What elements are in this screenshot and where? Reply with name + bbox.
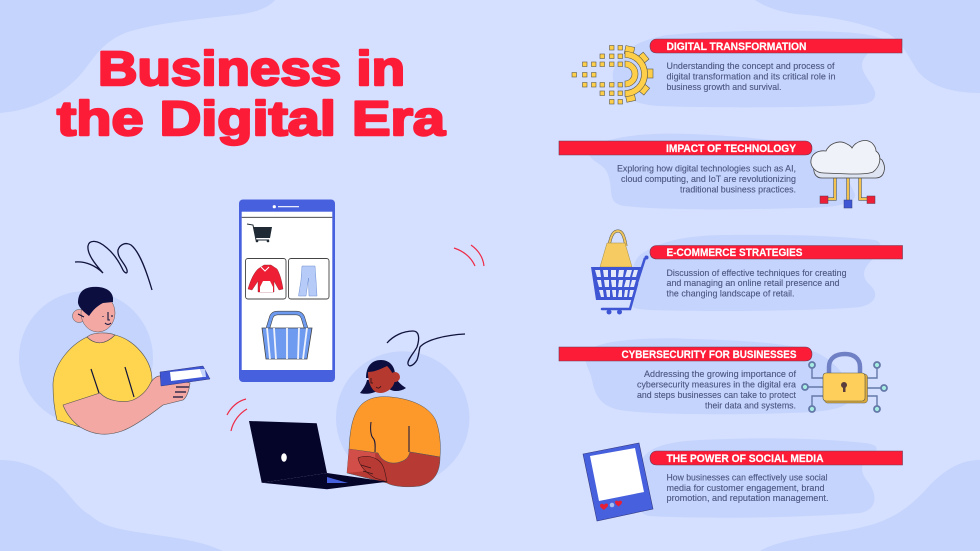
product: jeans [288, 258, 329, 299]
panel: impact of technology [559, 134, 884, 209]
icon: digital gear [572, 46, 653, 104]
title: Business in [98, 43, 405, 96]
icon: shopping cart [247, 224, 272, 242]
icon: social media post [583, 443, 653, 521]
illustration: man holding phone [19, 241, 210, 434]
description: the changing landscape of retail. [666, 288, 794, 298]
description [666, 472, 828, 503]
heading bar: IMPACT OF TECHNOLOGY [666, 143, 797, 155]
description: Understanding the concept and process of [666, 61, 835, 71]
description: Discussion of effective techniques for creating [666, 268, 847, 278]
icon: cloud network [811, 141, 884, 208]
title [57, 43, 445, 146]
description: business growth and survival. [666, 82, 782, 92]
heading bar: E-COMMERCE STRATEGIES [666, 247, 802, 259]
icon: shopping bag and cart [591, 231, 648, 314]
description: Exploring how digital technologies such as AI, [617, 164, 796, 174]
product: basket [262, 313, 312, 359]
heading bar: CYBERSECURITY FOR BUSINESSES [622, 349, 796, 361]
description: and steps businesses can take to protect [637, 390, 797, 400]
description: traditional business practices. [680, 184, 796, 194]
icon: padlock network [802, 354, 887, 412]
heading bar [650, 451, 902, 465]
description [666, 61, 836, 92]
illustration: shopping app phone [239, 200, 335, 382]
panel: the power of social media [583, 438, 902, 521]
panel: cybersecurity for businesses [559, 338, 887, 414]
heading bar: DIGITAL TRANSFORMATION [666, 41, 807, 53]
decoration: red signal arcs [227, 245, 484, 431]
heading bar [650, 39, 902, 53]
description: and managing an online retail presence and [666, 278, 840, 288]
description [666, 268, 847, 298]
description: Addressing the growing importance of [644, 369, 797, 379]
description: cybersecurity measures in the digital era [637, 380, 796, 390]
panel: digital transformation [572, 31, 902, 107]
description: promotion, and reputation management. [666, 493, 828, 503]
description: cloud computing, and IoT are revolutionizing [621, 174, 796, 184]
heading bar [559, 347, 812, 361]
heading bar [559, 141, 812, 155]
description [617, 164, 796, 194]
description: digital transformation and its critical role in [666, 72, 836, 82]
illustration: woman with laptop [249, 331, 469, 489]
laptop [249, 421, 387, 489]
product: red sweater [246, 258, 286, 299]
description [637, 369, 797, 410]
description: their data and systems. [705, 400, 796, 410]
description: How businesses can effectively use social [666, 472, 828, 482]
heading bar: THE POWER OF SOCIAL MEDIA [666, 453, 824, 465]
title: the Digital Era [57, 93, 445, 146]
description: media for customer engagement, brand [666, 483, 825, 493]
panel: e-commerce strategies [591, 231, 902, 314]
heading bar [650, 246, 902, 259]
